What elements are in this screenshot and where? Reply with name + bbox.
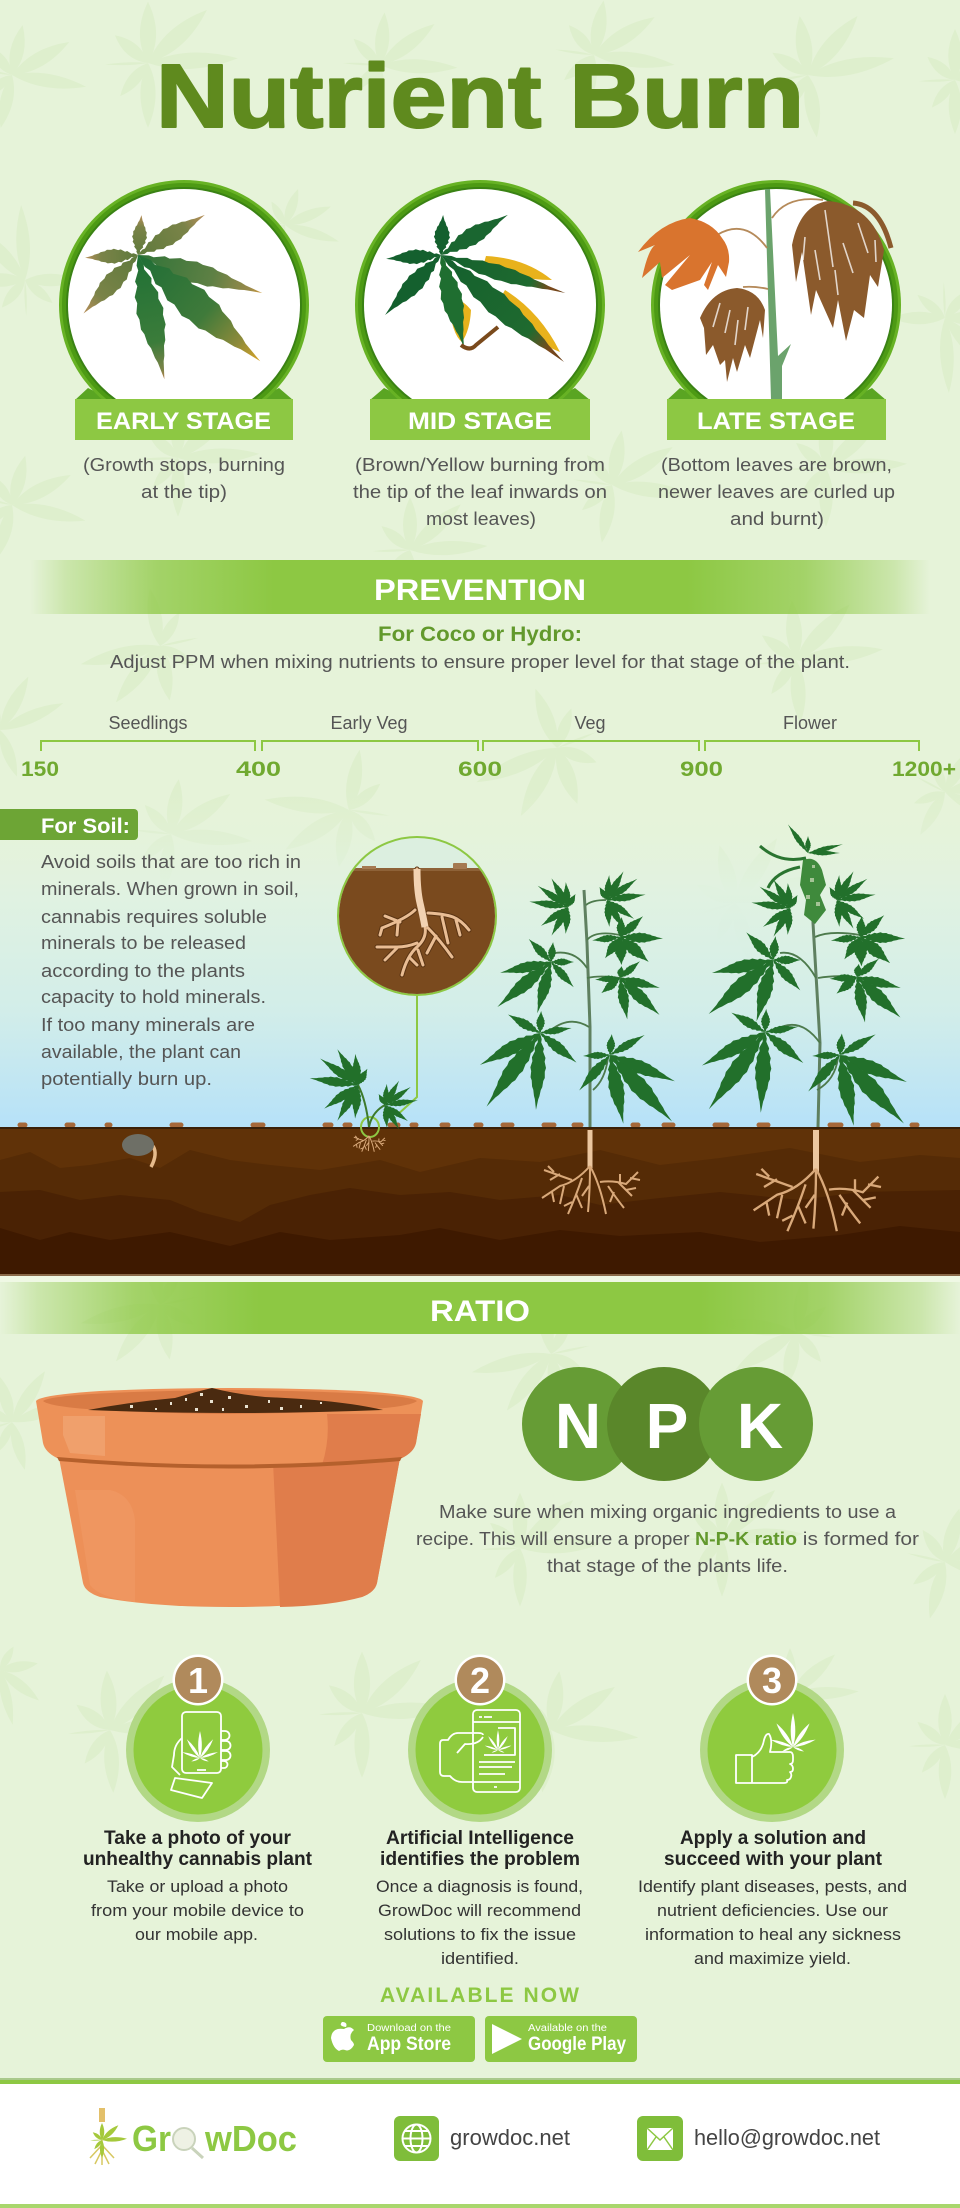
- inset: soil cross-section: [337, 836, 497, 996]
- text: soil advice: minerals to be released: [41, 933, 246, 953]
- text: soil advice: If too many minerals are: [41, 1015, 255, 1035]
- body: Once a diagnosis is found,: [376, 1877, 583, 1896]
- ppm values: [21, 758, 956, 781]
- step 3: [638, 1654, 912, 1968]
- heading: ratio: RATIO: [430, 1295, 530, 1328]
- button: app store: [323, 2016, 475, 2062]
- button: google play: Available on the: [528, 2023, 607, 2034]
- number badge: 2: [470, 1660, 490, 1701]
- title: Nutrient Burn: [156, 47, 804, 147]
- text: website: growdoc.net: [450, 2125, 570, 2150]
- body: Identify plant diseases, pests, and: [638, 1877, 907, 1896]
- banner: early stage: [75, 399, 293, 440]
- stage labels: [108, 713, 837, 733]
- heading: available now: AVAILABLE NOW: [380, 1984, 579, 2007]
- button: app store: App Store: [367, 2034, 451, 2055]
- heading: prevention: PREVENTION: [374, 574, 586, 607]
- soil ground: [0, 1125, 960, 1282]
- body: solutions to fix the issue: [384, 1925, 576, 1944]
- plant: flowering: [699, 823, 911, 1231]
- body: our mobile app.: [135, 1925, 258, 1944]
- subheading: coco or hydro: For Coco or Hydro:: [378, 623, 582, 646]
- stage labels: Flower: [783, 713, 837, 733]
- text: npk explanation: N-P-K ratio is formed for: [695, 1529, 902, 1549]
- ppm values: 150: [21, 758, 59, 781]
- heading: Artificial Intelligence: [386, 1828, 574, 1849]
- body: from your mobile device to: [91, 1901, 304, 1920]
- ppm values: 1200+: [892, 758, 956, 781]
- heading: Take a photo of your: [104, 1828, 292, 1849]
- heading: succeed with your plant: [664, 1849, 883, 1870]
- brackets: [41, 741, 919, 751]
- heading: ratio: [0, 1282, 960, 1334]
- npk circles: N: [555, 1390, 601, 1462]
- description: mid stage: (Brown/Yellow burning from: [355, 455, 605, 475]
- roots: [542, 1130, 640, 1214]
- panel: early stage: [59, 180, 309, 502]
- description: early stage: at the tip): [141, 482, 227, 502]
- icon: apple: [331, 2022, 354, 2051]
- number badge: [746, 1654, 798, 1706]
- body: GrowDoc will recommend: [378, 1901, 581, 1920]
- step 1: [83, 1654, 313, 1944]
- body: Take or upload a photo: [107, 1877, 288, 1896]
- ppm values: 600: [458, 758, 502, 781]
- text: npk explanation: that stage of the plants life.: [547, 1556, 788, 1576]
- button: google play: Google Play: [528, 2034, 626, 2055]
- body: and maximize yield.: [694, 1949, 851, 1968]
- tag: for soil: [0, 809, 138, 840]
- sky gradient: [0, 790, 960, 1130]
- icon: mail: [637, 2116, 683, 2161]
- ppm scale: [21, 713, 956, 781]
- oval with leaf: [355, 180, 605, 399]
- stage labels: Veg: [574, 713, 606, 733]
- ppm values: 900: [680, 758, 723, 781]
- icon circle: [126, 1678, 270, 1822]
- text: soil advice: cannabis requires soluble: [41, 907, 267, 927]
- heading: prevention: [30, 560, 930, 614]
- pot: [36, 1388, 423, 1607]
- roots: [754, 1130, 881, 1231]
- heading: identifies the problem: [380, 1849, 580, 1870]
- banner: late stage: [667, 399, 886, 440]
- number badge: [172, 1654, 224, 1706]
- body: identified.: [441, 1949, 519, 1968]
- icon circle: [408, 1678, 552, 1822]
- oval with leaf: [59, 180, 309, 399]
- icon circle: [700, 1678, 844, 1822]
- text: soil advice: minerals. When grown in soil,: [41, 879, 299, 899]
- text: adjust ppm: Adjust PPM when mixing nutrients to ensure proper level for that stage of the plant.: [110, 652, 850, 672]
- npk circles: P: [646, 1390, 688, 1462]
- body: nutrient deficiencies. Use our: [657, 1901, 888, 1920]
- number badge: [454, 1654, 506, 1706]
- description: mid stage: the tip of the leaf inwards on: [353, 482, 607, 502]
- banner: mid stage: MID STAGE: [408, 408, 552, 435]
- npk circles: [522, 1367, 813, 1481]
- plant: vegetative: [477, 870, 678, 1214]
- npk circles: K: [737, 1390, 783, 1462]
- icon: play: [492, 2024, 522, 2054]
- logo: wDoc: [204, 2118, 297, 2159]
- icon: globe: [394, 2116, 439, 2161]
- text: npk explanation: Make sure when mixing organic ingredients to use a: [439, 1502, 897, 1522]
- description: early stage: (Growth stops, burning: [83, 455, 285, 475]
- panel: late stage: [638, 180, 901, 529]
- description: late stage: newer leaves are curled up: [658, 482, 895, 502]
- flower top: [786, 823, 844, 856]
- panel: mid stage: [353, 180, 612, 529]
- stage labels: Seedlings: [108, 713, 188, 733]
- seed: [122, 1134, 155, 1167]
- text: soil advice: available, the plant can: [41, 1042, 241, 1062]
- seedling with connector: [309, 996, 418, 1152]
- oval with drooping leaves: [638, 180, 901, 399]
- number badge: 1: [188, 1660, 208, 1701]
- text: email: hello@growdoc.net: [694, 2125, 880, 2150]
- text: soil advice: Avoid soils that are too rich in: [41, 852, 301, 872]
- heading: unhealthy cannabis plant: [83, 1849, 313, 1870]
- banner: early stage: EARLY STAGE: [96, 408, 271, 435]
- ppm values: 400: [236, 758, 281, 781]
- step 2: [376, 1654, 588, 1968]
- description: late stage: and burnt): [730, 509, 824, 529]
- logo: Gr: [132, 2118, 171, 2159]
- tag: for soil: For Soil:: [41, 815, 130, 838]
- text: soil advice: according to the plants: [41, 961, 245, 981]
- button: app store: Download on the: [367, 2023, 451, 2034]
- soil mound: [88, 1388, 383, 1413]
- text: soil advice: capacity to hold minerals.: [41, 987, 266, 1007]
- stage labels: Early Veg: [330, 713, 408, 733]
- banner: late stage: LATE STAGE: [697, 408, 855, 435]
- logo: [90, 2108, 297, 2165]
- text: soil advice: potentially burn up.: [41, 1069, 212, 1089]
- bud cluster: [800, 859, 826, 924]
- heading: Apply a solution and: [680, 1828, 866, 1849]
- description: mid stage: most leaves): [426, 509, 536, 529]
- description: late stage: (Bottom leaves are brown,: [661, 455, 892, 475]
- button: google play: [485, 2016, 637, 2062]
- body: information to heal any sickness: [645, 1925, 901, 1944]
- banner: mid stage: [370, 399, 590, 440]
- text: npk explanation: recipe. This will ensure a proper: [416, 1529, 695, 1549]
- number badge: 3: [762, 1660, 782, 1701]
- footer: [0, 2078, 960, 2208]
